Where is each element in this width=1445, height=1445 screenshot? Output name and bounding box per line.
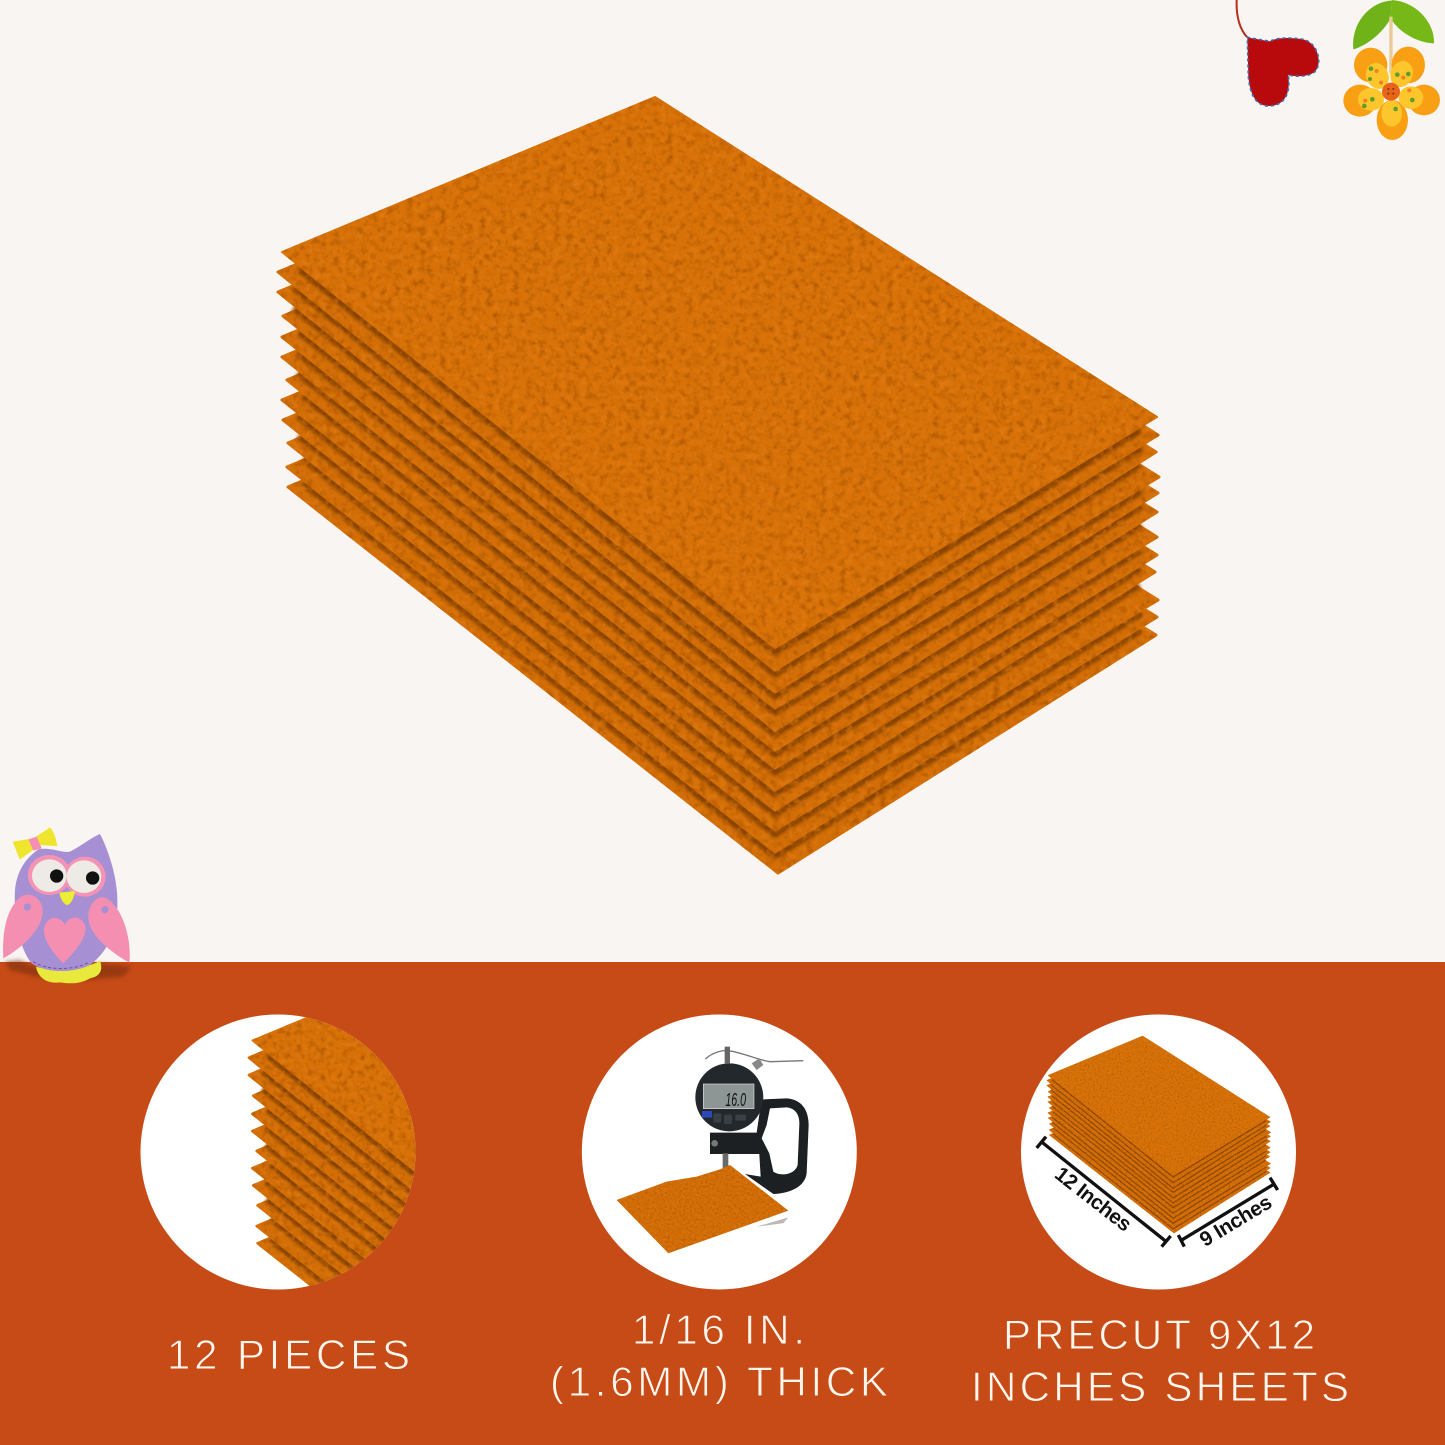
bottom band	[0, 962, 1445, 1445]
decoration: red felt heart on string	[1237, 0, 1319, 106]
decoration: orange felt flower with leaves	[1343, 0, 1440, 140]
caption: thickness	[550, 1306, 888, 1405]
gauge top lever	[705, 1051, 803, 1062]
caption: sheet size: INCHES SHEETS	[971, 1363, 1349, 1410]
circle 2: thickness gauge	[582, 1014, 857, 1289]
dimension lines and labels: 9 Inches	[1196, 1191, 1276, 1252]
gauge dial	[695, 1063, 763, 1131]
circle 2: thickness gauge: 16.0	[725, 1089, 746, 1110]
caption: thickness: (1.6MM) THICK	[550, 1358, 888, 1405]
caption: thickness: 1/16 IN.	[632, 1306, 805, 1353]
felt sheet sample	[757, 1217, 788, 1227]
caption: 12 pieces: 12 PIECES	[167, 1331, 410, 1378]
circle 3: sheet dimensions	[1021, 1014, 1296, 1290]
dimension lines and labels	[1037, 1137, 1278, 1252]
decoration: purple felt owl	[3, 827, 132, 983]
main image: stack of orange felt sheets	[278, 97, 1159, 873]
circle 1: 12 pieces close-up	[140, 1014, 416, 1290]
gauge frame	[710, 1098, 809, 1194]
close-up of sheet stack edge	[248, 1017, 416, 1286]
dimension lines and labels: 12 Inches	[1050, 1162, 1136, 1236]
caption: sheet size: PRECUT 9X12	[1003, 1311, 1315, 1358]
small sheet stack	[1047, 1036, 1271, 1233]
caption: sheet size	[971, 1311, 1349, 1410]
